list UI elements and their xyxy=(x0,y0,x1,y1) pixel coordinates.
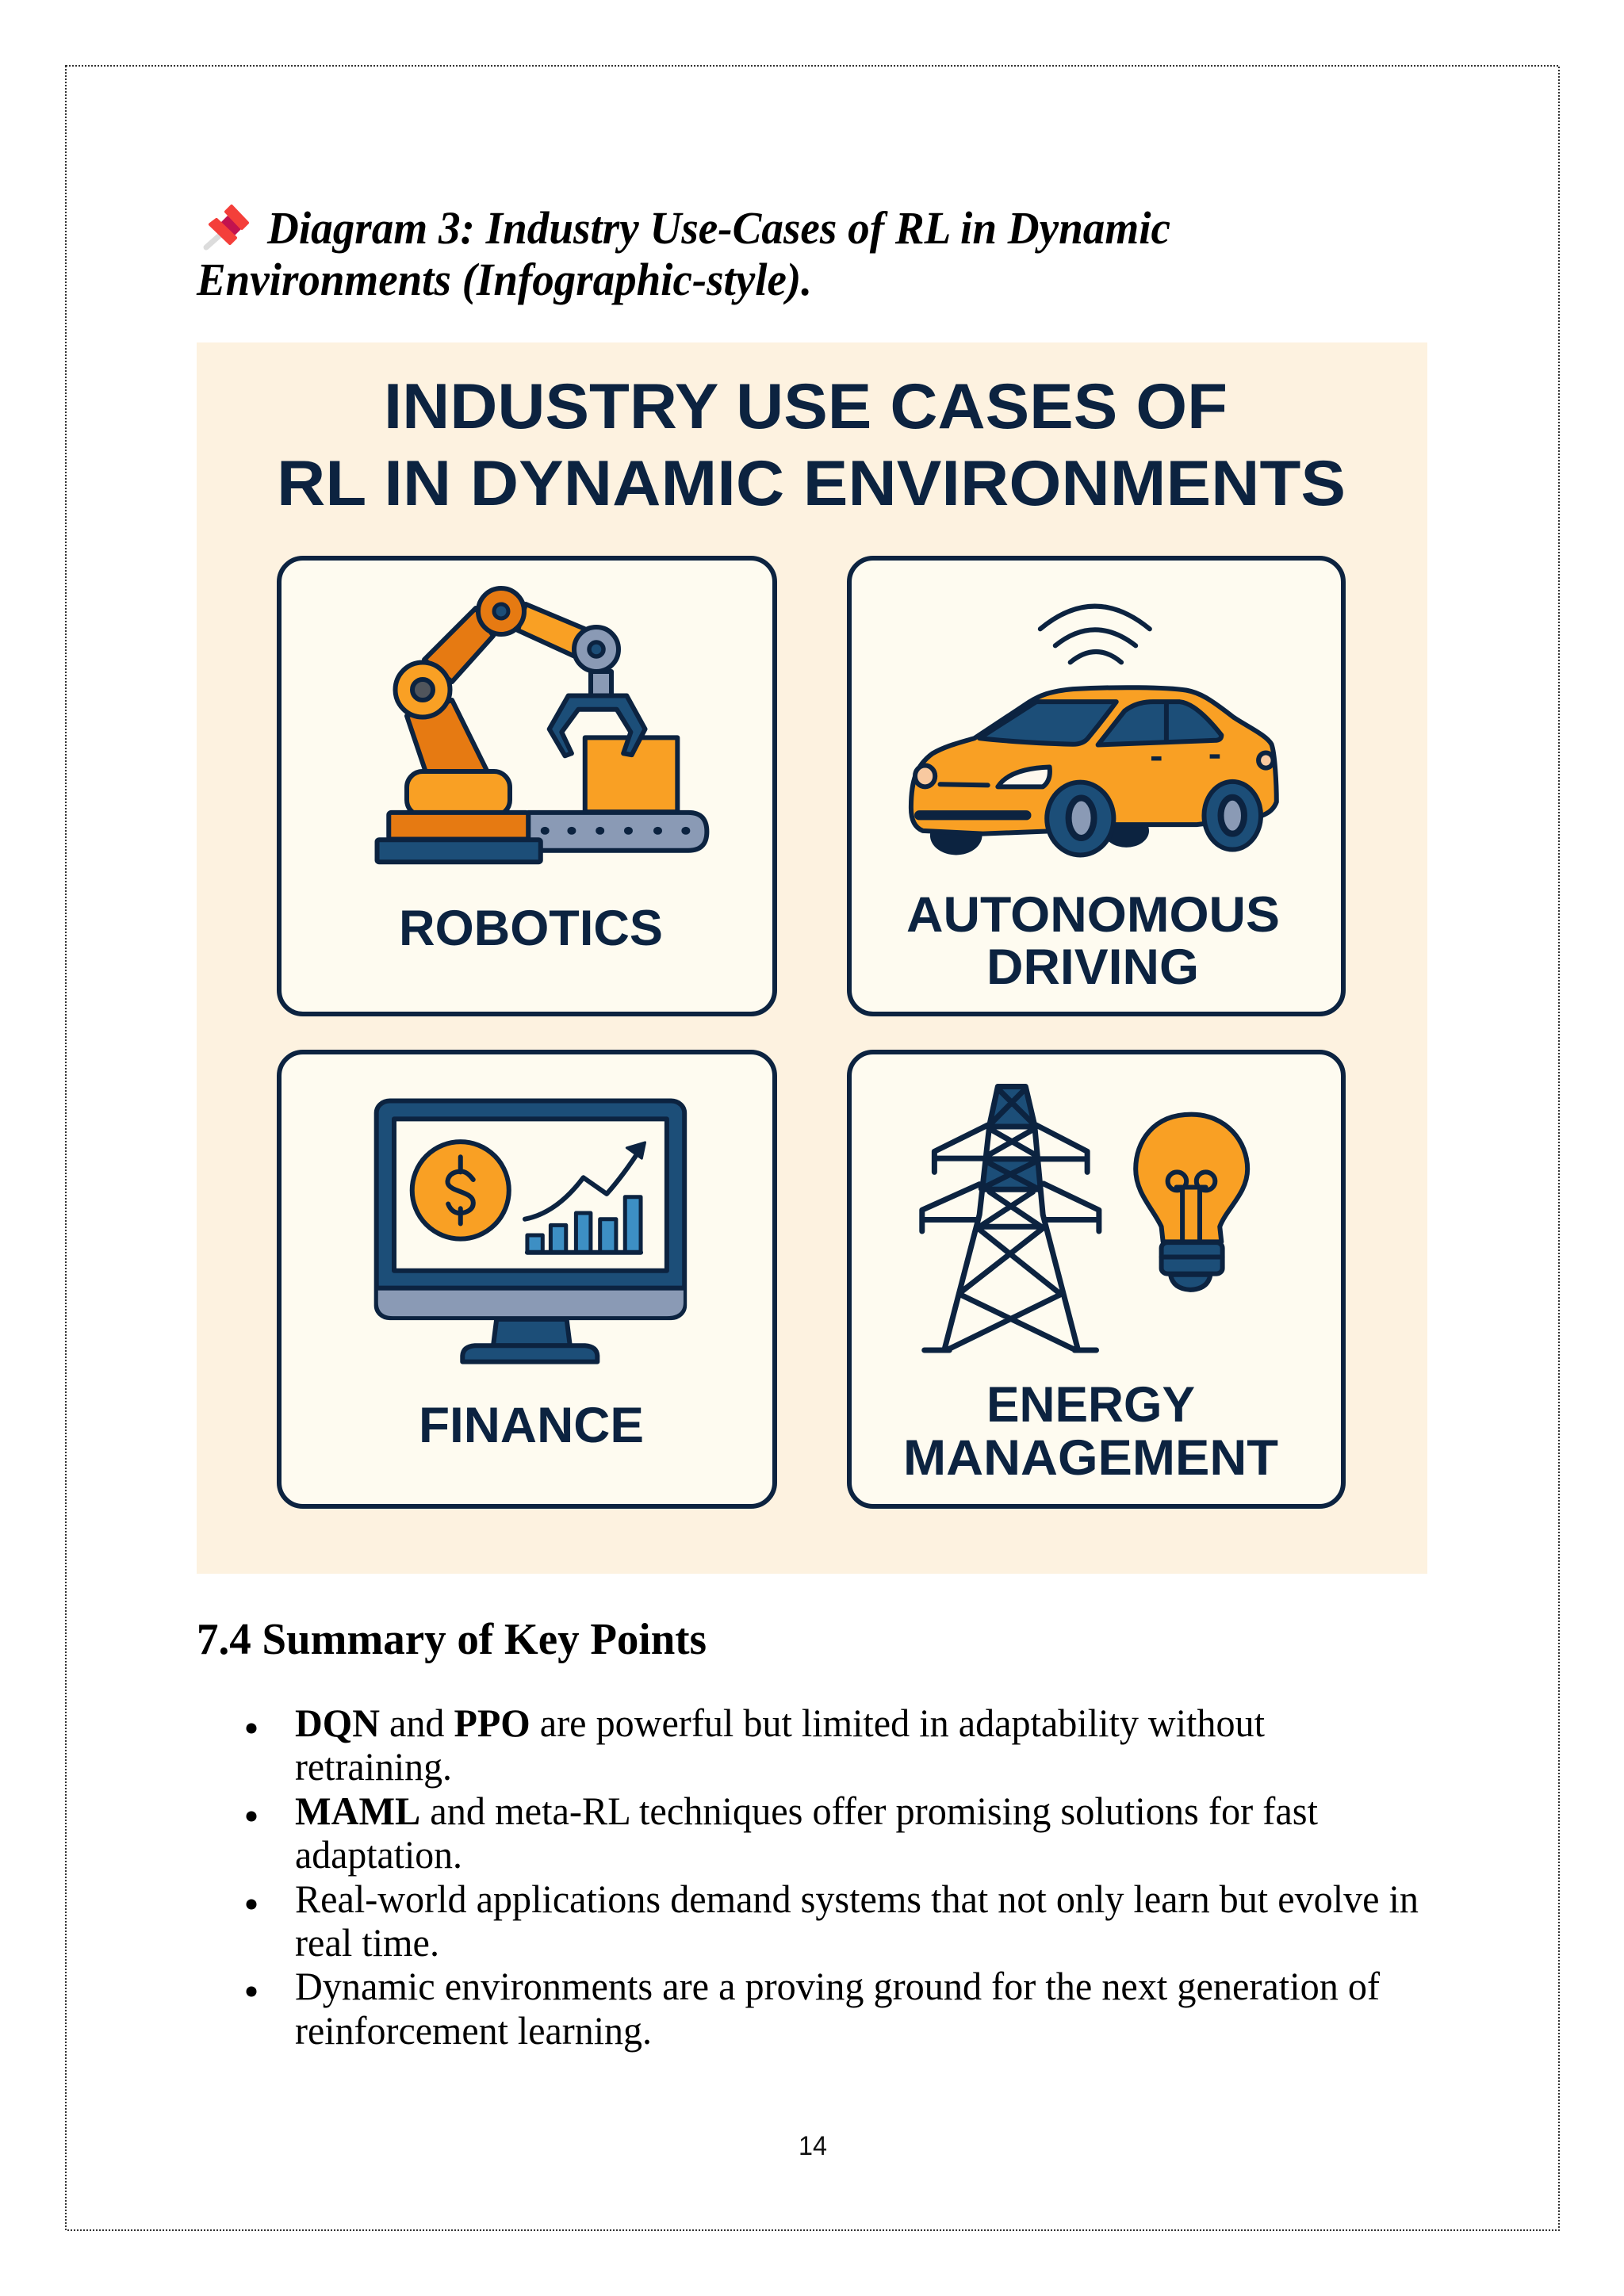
card frame xyxy=(279,558,775,1014)
label xyxy=(903,1377,1278,1486)
text block: bullet list xyxy=(246,1701,1419,2053)
label: ENERGY xyxy=(986,1377,1195,1433)
bullet 2: adaptation. xyxy=(295,1832,462,1877)
panel: energy management xyxy=(849,1052,1343,1506)
heading: diagram caption xyxy=(196,202,1170,305)
card frame xyxy=(849,1052,1343,1506)
caption line 2: Environments (Infographic-style). xyxy=(196,254,812,305)
label: ROBOTICS xyxy=(399,901,663,956)
icon: red pushpin xyxy=(206,206,247,247)
card frame xyxy=(279,1052,775,1506)
caption line 1: Diagram 3: Industry Use-Cases of RL in Dynamic xyxy=(266,202,1170,254)
panel: robotics xyxy=(279,558,775,1014)
label: FINANCE xyxy=(419,1398,644,1453)
bullet 1: retraining. xyxy=(295,1744,452,1789)
label: MANAGEMENT xyxy=(903,1430,1278,1486)
bullet 4 xyxy=(246,1964,1380,2053)
card frame xyxy=(849,558,1343,1014)
bullet 1 xyxy=(246,1701,1265,1789)
icon: monitor with chart xyxy=(377,1100,684,1362)
panel: finance xyxy=(279,1052,775,1506)
icon: connected car xyxy=(911,607,1277,855)
icon: robot arm and conveyor xyxy=(377,588,707,862)
infographic title xyxy=(277,371,1346,519)
panel: infographic xyxy=(197,342,1427,1574)
label: AUTONOMOUS xyxy=(906,887,1280,943)
icon: light bulb xyxy=(1136,1115,1247,1290)
bullet 4: reinforcement learning. xyxy=(295,2008,652,2053)
bullet 3 xyxy=(246,1877,1419,1965)
bullet 1: DQN and PPO are powerful but limited in adaptability without xyxy=(295,1701,1265,1745)
panel: autonomous driving xyxy=(849,558,1343,1014)
infographic title: INDUSTRY USE CASES OF xyxy=(384,371,1228,442)
bullet 3: real time. xyxy=(295,1920,439,1965)
bullet 4: Dynamic environments are a proving ground for the next generation of xyxy=(295,1964,1380,2008)
page number: 14 xyxy=(799,2131,827,2161)
heading: section 7.4: 7.4 Summary of Key Points xyxy=(197,1615,707,1664)
panel background xyxy=(197,342,1427,1574)
label xyxy=(906,887,1280,995)
label: DRIVING xyxy=(986,939,1199,995)
bullet 3: Real-world applications demand systems that not only learn but evolve in xyxy=(295,1877,1419,1921)
bullet 2 xyxy=(246,1789,1318,1877)
infographic title: RL IN DYNAMIC ENVIRONMENTS xyxy=(277,448,1346,519)
icon: transmission tower xyxy=(922,1086,1099,1350)
bullet 2: MAML and meta-RL techniques offer promising solutions for fast xyxy=(295,1789,1318,1833)
